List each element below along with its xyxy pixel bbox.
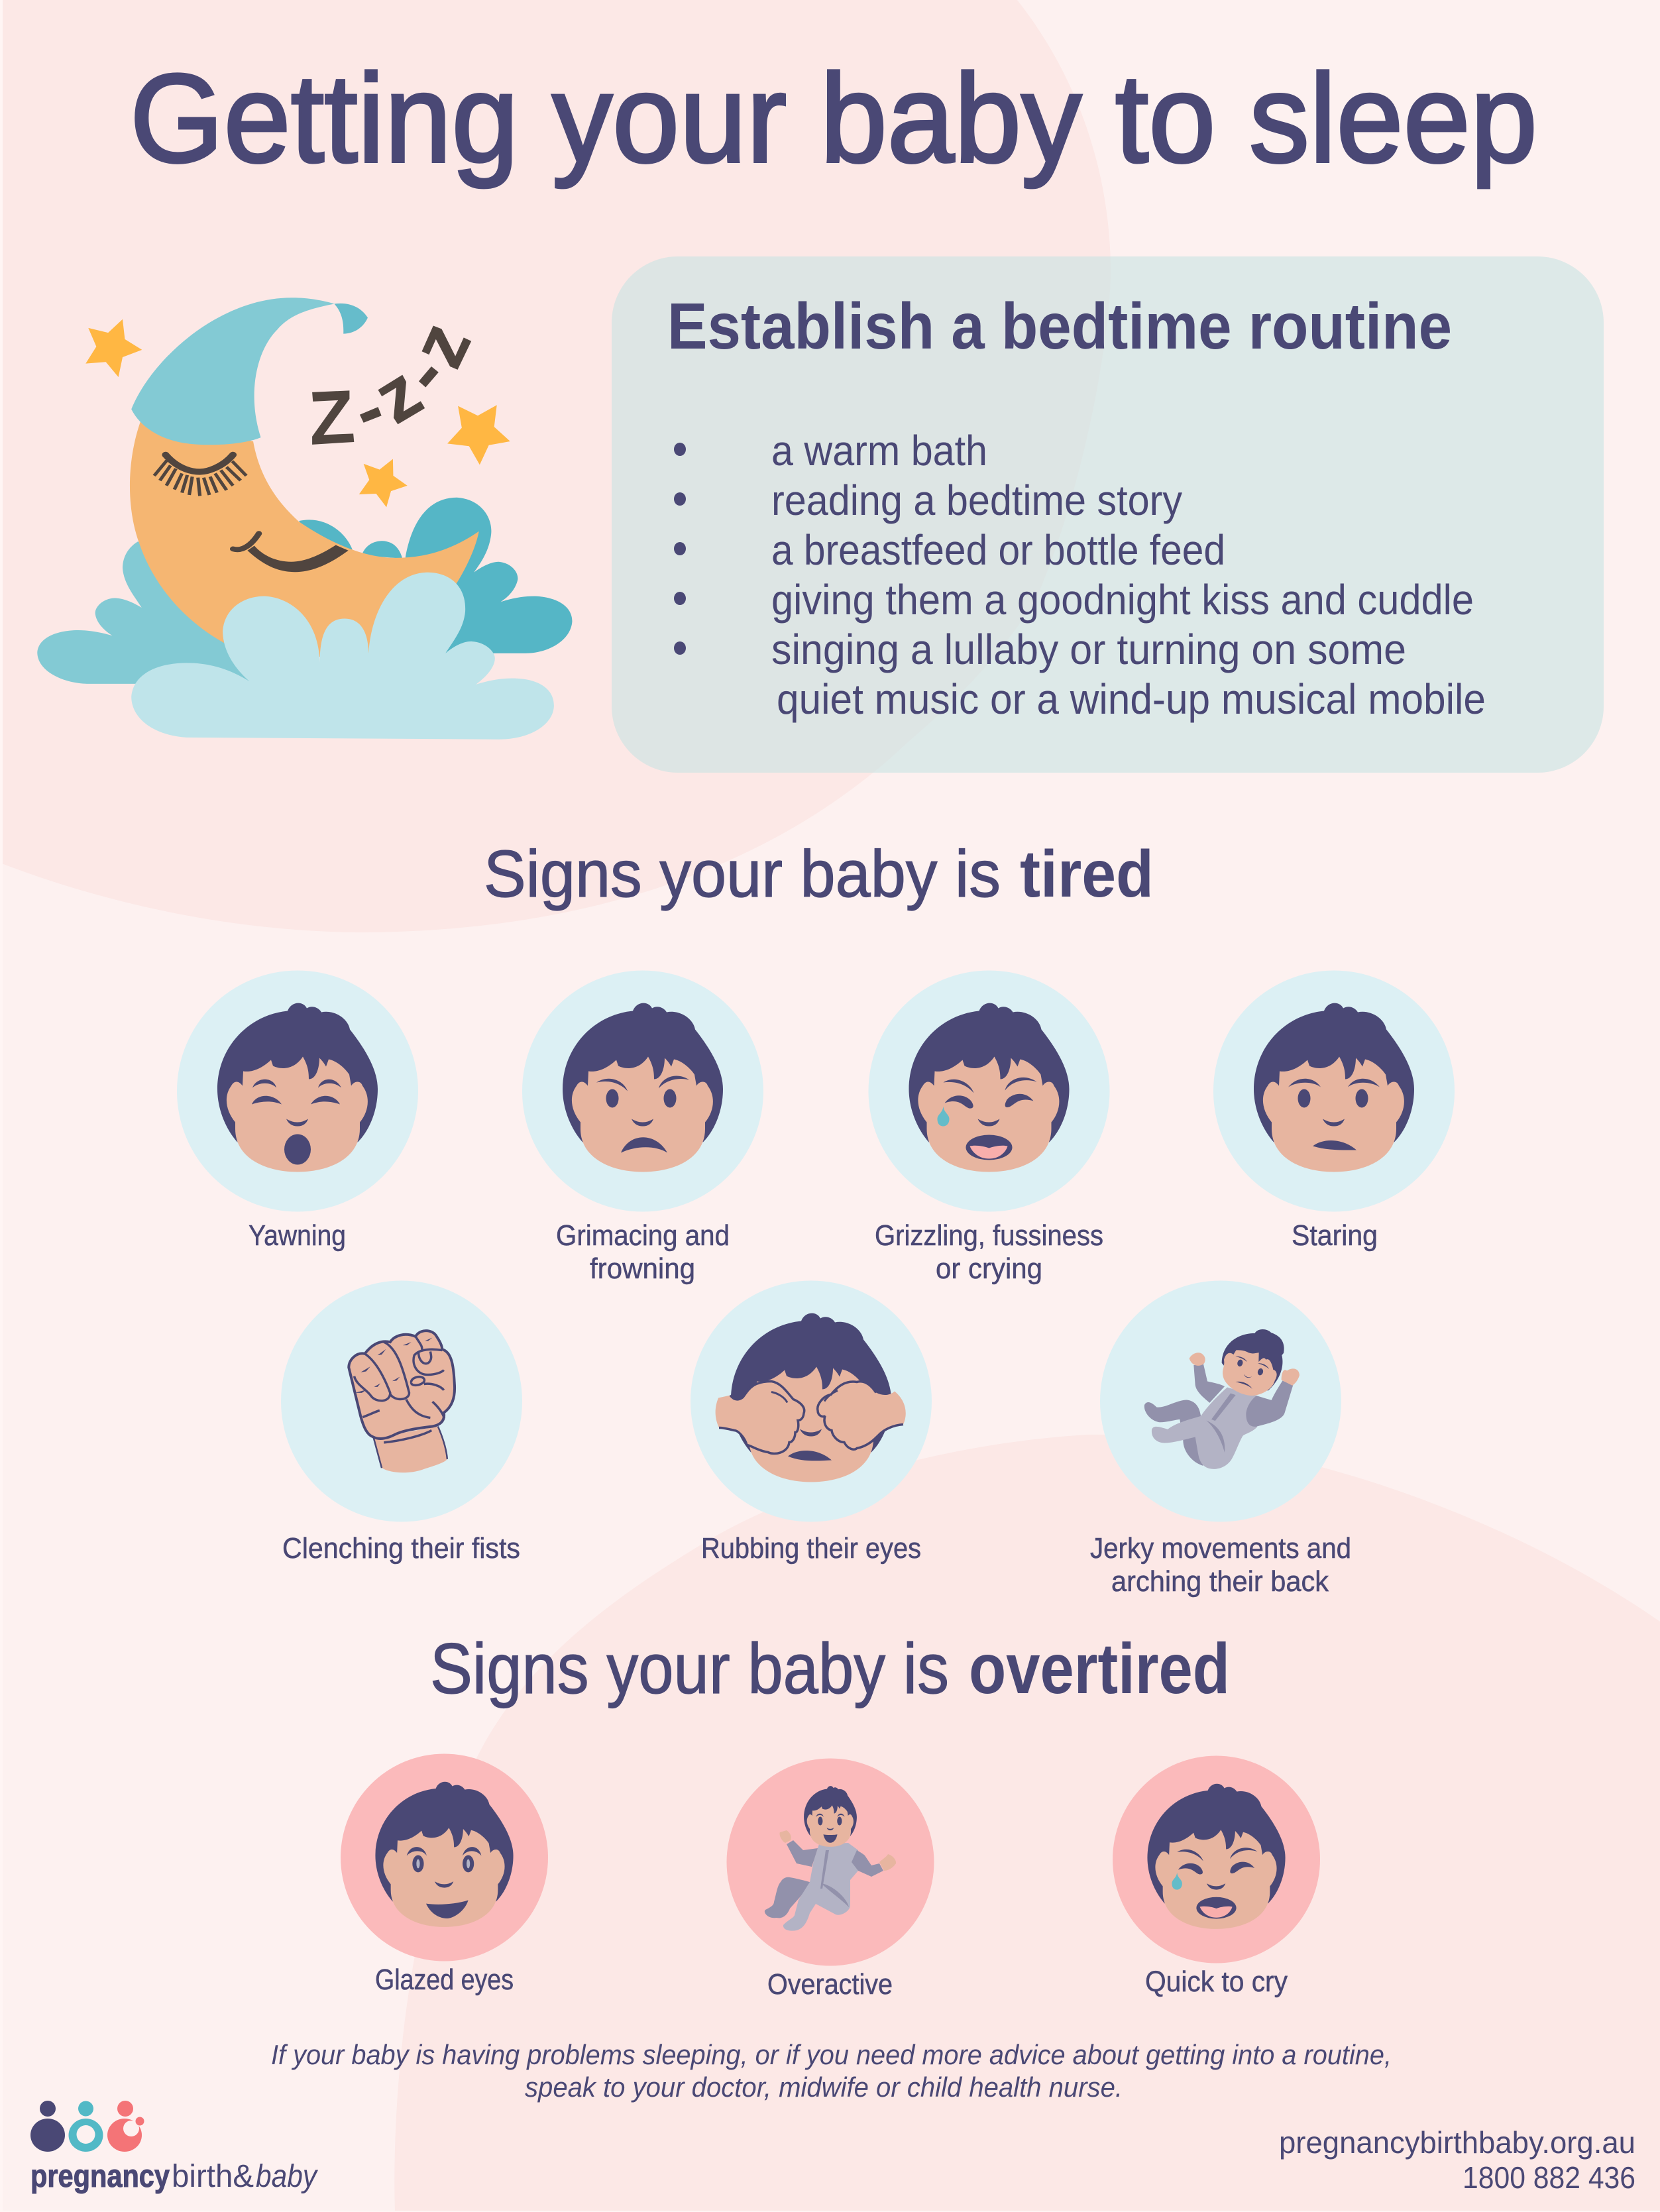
moon: [130, 420, 479, 669]
sign: staring: Staring: [1292, 1219, 1378, 1252]
sign: quick to cry: [1113, 1756, 1320, 1998]
heading: signs overtired: overtired: [969, 1628, 1230, 1708]
cloud: dark teal back: [188, 498, 572, 653]
logo: pregnancy birth and baby: baby: [256, 2159, 319, 2194]
bullet list: a breastfeed or bottle feed: [771, 526, 1225, 574]
sign: rubbing eyes: [691, 1280, 932, 1565]
title: Getting your baby to sleep: [130, 48, 1537, 189]
nightcap: [131, 298, 334, 445]
advice note: [271, 2039, 1392, 2103]
sign: yawning: [177, 970, 418, 1252]
icon: rubbing hands: [716, 1381, 906, 1454]
heading: signs overtired: Signs your baby is: [430, 1628, 949, 1708]
background shape: top blob: [0, 0, 1111, 932]
bullet list: quiet music or a wind-up musical mobile: [777, 675, 1486, 723]
advice note: speak to your doctor, midwife or child health nurse.: [525, 2072, 1123, 2103]
panel background: [612, 256, 1604, 773]
sign: grizzling: or crying: [936, 1252, 1042, 1285]
bullet dots: [674, 443, 686, 655]
moon closed eye: [154, 455, 259, 549]
bullet list: [771, 427, 1486, 723]
stars: [85, 319, 510, 507]
sign: grimacing and frowning: Grimacing and: [556, 1219, 730, 1252]
logo figures: [30, 2101, 144, 2152]
icon: overactive baby: [765, 1786, 896, 1931]
logo: pregnancy birth and baby: birth&: [172, 2159, 254, 2194]
icon: arching baby: [1144, 1329, 1300, 1469]
sign: jerky movements: Jerky movements and: [1090, 1532, 1351, 1565]
bullet list: reading a bedtime story: [771, 476, 1182, 524]
sign: grizzling: Grizzling, fussiness: [875, 1219, 1103, 1252]
cloud: mid teal left: [37, 541, 266, 684]
sign: jerky movements: [1090, 1280, 1351, 1598]
sign: grizzling: [868, 970, 1109, 1285]
bullet list: a warm bath: [771, 427, 987, 474]
sign: quick to cry: Quick to cry: [1145, 1965, 1288, 1998]
sign: clenching fists: [281, 1280, 522, 1565]
sign: grimacing and frowning: frowning: [590, 1252, 695, 1285]
sign: glazed eyes: [341, 1753, 548, 1996]
bullet list: giving them a goodnight kiss and cuddle: [771, 576, 1474, 624]
illustration: sleeping moon: [37, 298, 572, 740]
contact details: [1279, 2125, 1635, 2195]
logo: pregnancy birth and baby: [30, 2101, 319, 2194]
sign: overactive: [726, 1759, 934, 2001]
nightcap tip: [334, 304, 368, 334]
background shape: bottom blob: [394, 1435, 1660, 2212]
sign: glazed eyes: Glazed eyes: [375, 1963, 514, 1996]
sign: rubbing eyes: Rubbing their eyes: [701, 1532, 921, 1565]
sign: overactive: Overactive: [767, 1968, 893, 2001]
sleeping z-z-z: [312, 325, 471, 445]
icon: fist: [349, 1331, 455, 1472]
contact details: pregnancybirthbaby.org.au: [1279, 2125, 1635, 2160]
sign: jerky movements: arching their back: [1111, 1565, 1329, 1598]
heading: signs tired: Signs your baby is: [484, 837, 1001, 911]
heading: signs tired: tired: [1020, 837, 1154, 911]
sign: yawning: Yawning: [249, 1219, 346, 1252]
panel: establish a bedtime routine: [612, 256, 1604, 773]
logo wordmark: pregnancy: [30, 2159, 170, 2194]
sign: grimacing and frowning: [522, 970, 763, 1285]
moon smile: [247, 545, 349, 572]
sign: staring: [1213, 970, 1455, 1252]
sign: clenching fists: Clenching their fists: [282, 1532, 520, 1565]
panel heading: Establish a bedtime routine: [667, 290, 1452, 362]
cloud: pale front: [131, 573, 554, 740]
bullet list: singing a lullaby or turning on some: [771, 626, 1406, 673]
contact details: 1800 882 436: [1463, 2160, 1635, 2195]
advice note: If your baby is having problems sleeping, or if you need more advice about getting into a routine,: [271, 2039, 1392, 2070]
